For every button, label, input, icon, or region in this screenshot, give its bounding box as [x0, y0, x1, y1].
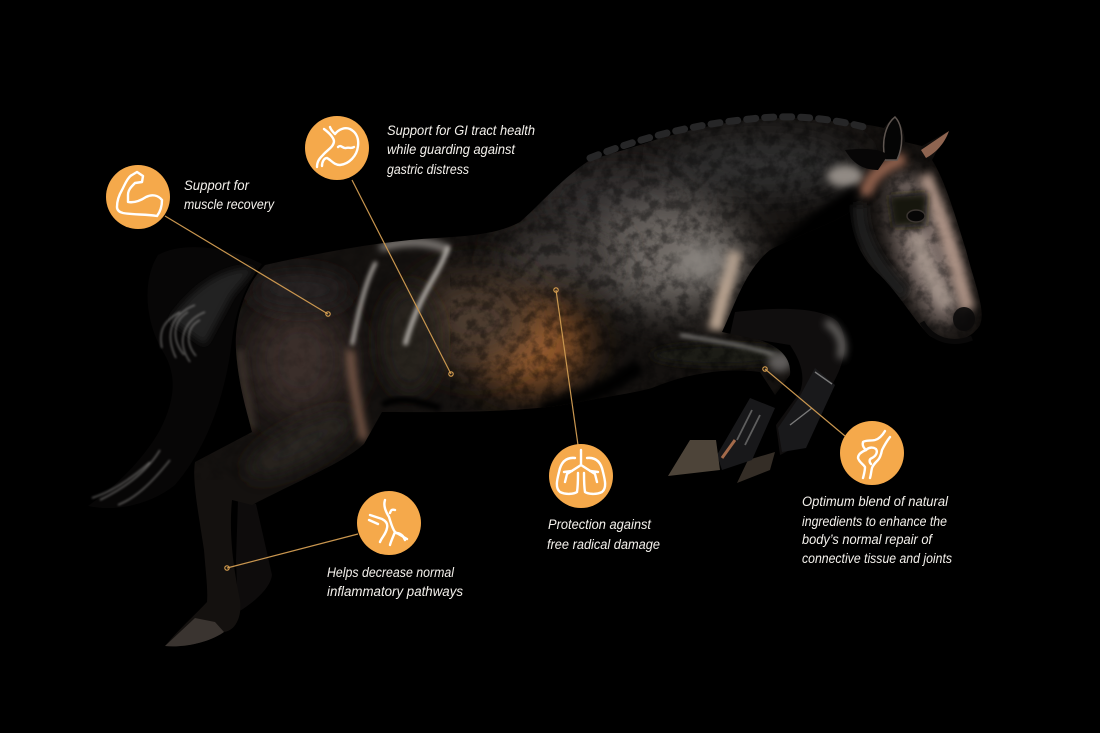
icon: joint — [840, 421, 904, 485]
tail — [88, 247, 262, 508]
text: gastric distress: while guarding against — [387, 142, 516, 157]
text: free radical damage: free radical damage — [547, 537, 660, 552]
connector: muscle — [165, 216, 330, 316]
icon: airways — [357, 491, 421, 555]
nostril and muzzle — [922, 307, 975, 341]
text: joints: body’s normal repair of — [802, 532, 933, 547]
text: free radical damage: Protection against — [548, 517, 652, 532]
text: joints: connective tissue and joints — [802, 551, 952, 566]
text: gastric distress: Support for GI tract health — [387, 123, 535, 138]
forelock shadow — [845, 149, 888, 170]
icon: lungs — [549, 444, 613, 508]
horse illustration — [88, 100, 990, 646]
front leg boot — [717, 398, 775, 470]
text: gastric distress: gastric distress — [387, 162, 469, 177]
horse shading — [236, 122, 979, 478]
connector: joint — [763, 367, 845, 436]
text: joints: Optimum blend of natural — [802, 494, 949, 509]
front ear — [884, 117, 902, 160]
connector: lungs — [554, 288, 578, 445]
text: joints: ingredients to enhance the — [802, 514, 947, 529]
connector: airways — [225, 534, 358, 570]
far front leg — [730, 309, 845, 483]
text: inflammatory pathways: inflammatory pathways — [327, 584, 463, 599]
far ear — [921, 131, 949, 158]
text: muscle recovery: Support for — [184, 178, 249, 193]
far hind leg — [236, 500, 272, 612]
rear hoof — [165, 618, 224, 646]
text: inflammatory pathways: Helps decrease normal — [327, 565, 455, 580]
icon: stomach — [305, 116, 369, 180]
text: muscle recovery: muscle recovery — [184, 197, 275, 212]
main body silhouette — [165, 118, 982, 646]
mane braids — [590, 117, 868, 158]
connector: stomach — [352, 180, 453, 376]
eye — [907, 210, 925, 222]
front hoof — [668, 440, 720, 476]
icon: muscle — [106, 165, 170, 229]
